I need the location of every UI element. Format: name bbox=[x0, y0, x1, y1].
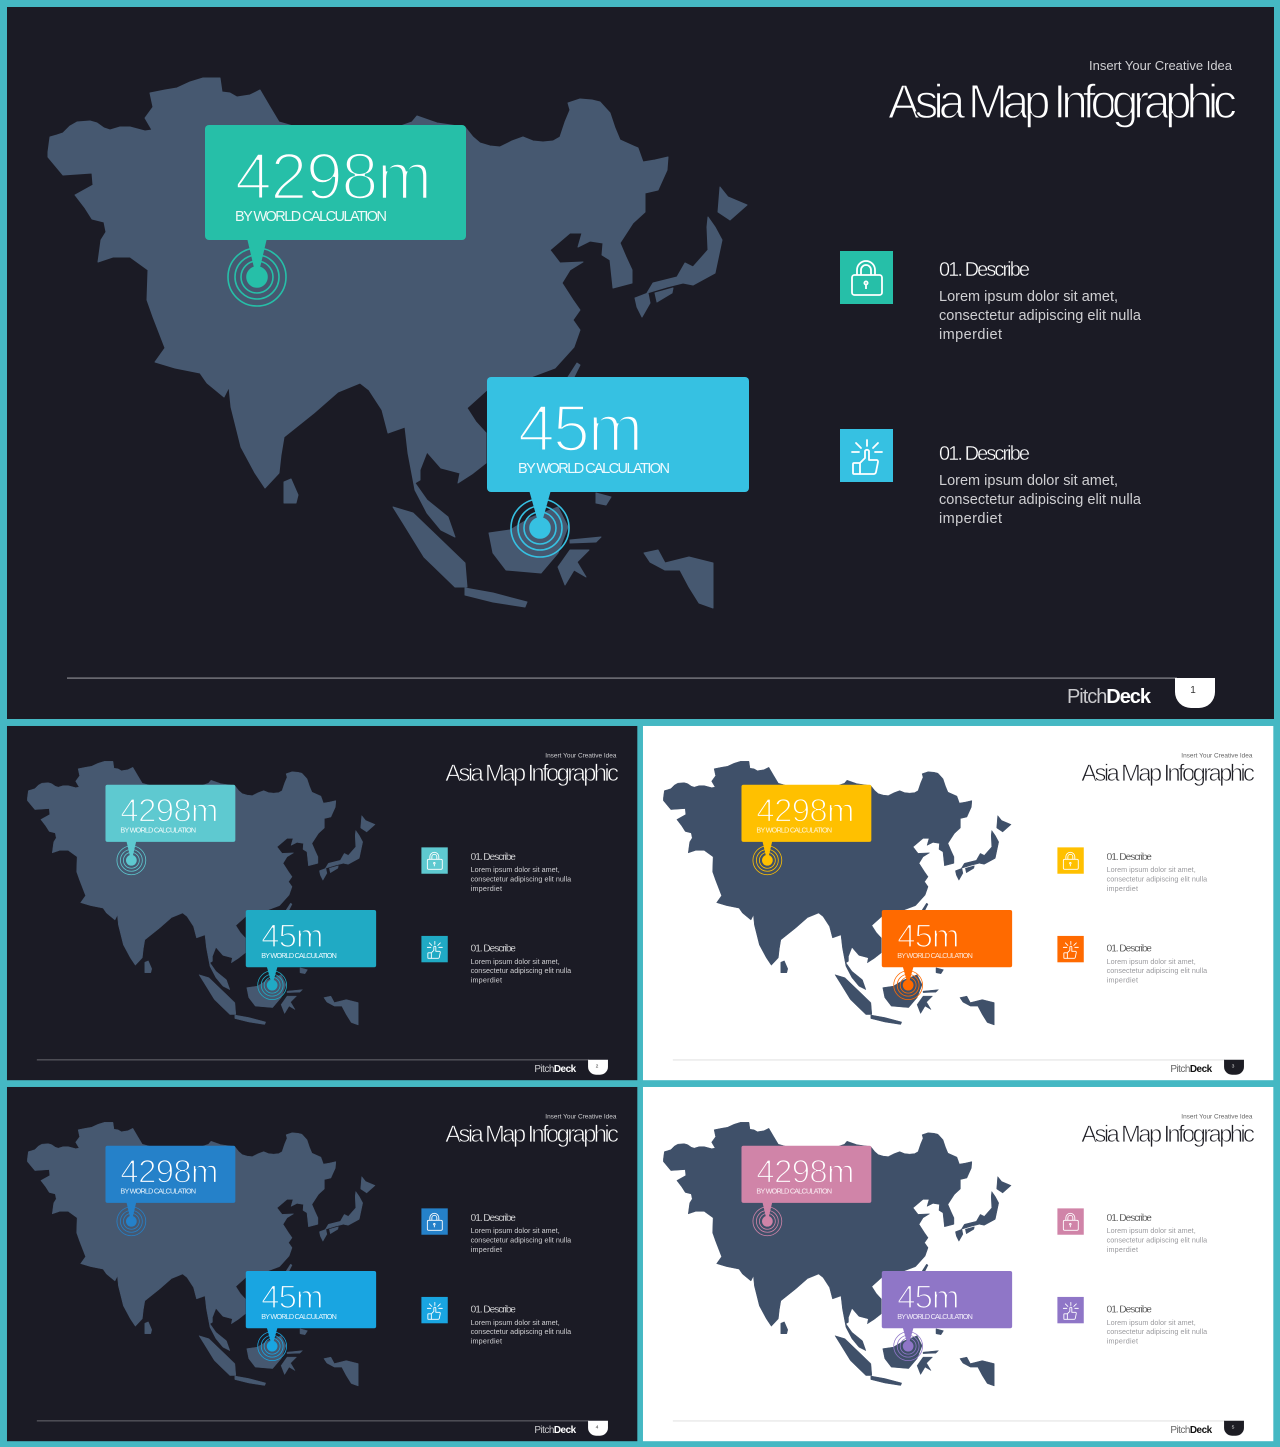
text block: describe 1: consectetur adipiscing elit nulla bbox=[1107, 875, 1207, 884]
target rings: central Asia bbox=[753, 846, 782, 875]
text block: describe 1: consectetur adipiscing elit nulla bbox=[1107, 1236, 1207, 1245]
panel: slide 2 small dark aqua bbox=[7, 726, 637, 1080]
text block: describe 2: 01. Describe bbox=[471, 943, 516, 954]
text block: describe 2: consectetur adipiscing elit nulla bbox=[939, 492, 1142, 508]
callout: 45m: 45m bbox=[261, 1278, 323, 1315]
text block: describe 1: 01. Describe bbox=[939, 259, 1030, 281]
callout: 4298m bbox=[105, 785, 235, 858]
callout: 4298m: BY WORLD CALCULATION bbox=[120, 1186, 196, 1195]
title: Asia Map Infographic bbox=[445, 1121, 619, 1148]
text block: describe 2: 01. Describe bbox=[1107, 943, 1152, 954]
text block: describe 1 bbox=[939, 259, 1142, 343]
icon: thumb up bbox=[421, 936, 448, 962]
text block: describe 1: consectetur adipiscing elit nulla bbox=[939, 308, 1142, 324]
callout: 4298m: BY WORLD CALCULATION bbox=[756, 825, 832, 834]
page tab: 3 bbox=[1232, 1063, 1235, 1069]
text block: describe 1: 01. Describe bbox=[471, 852, 516, 863]
page tab bbox=[588, 1060, 608, 1075]
panel: slide 5 small light pink purple bbox=[643, 1087, 1273, 1441]
callout: 45m bbox=[882, 910, 1012, 982]
callout: 45m bbox=[882, 1271, 1012, 1343]
callout: 4298m: BY WORLD CALCULATION bbox=[756, 1186, 832, 1195]
text block: describe 2: imperdiet bbox=[1107, 1337, 1138, 1346]
text block: describe 1: Lorem ipsum dolor sit amet, bbox=[471, 1226, 560, 1235]
text block: describe 2 bbox=[939, 443, 1142, 527]
footer logo: PitchDeck bbox=[1067, 686, 1152, 708]
text block: describe 2: imperdiet bbox=[939, 511, 1002, 527]
callout: 45m: 45m bbox=[261, 917, 323, 954]
text block: describe 1: imperdiet bbox=[939, 327, 1002, 343]
target rings: Borneo bbox=[894, 1332, 923, 1361]
text block: describe 1: imperdiet bbox=[1107, 1245, 1138, 1254]
page tab bbox=[1224, 1060, 1244, 1075]
text block: describe 2: Lorem ipsum dolor sit amet, bbox=[1107, 957, 1196, 966]
icon: thumb up bbox=[1057, 936, 1084, 962]
callout: 4298m: 4298m bbox=[756, 792, 854, 829]
callout: 4298m bbox=[741, 785, 871, 858]
text block: describe 2: imperdiet bbox=[471, 1337, 502, 1346]
page tab bbox=[1224, 1421, 1244, 1436]
callout: 45m: BY WORLD CALCULATION bbox=[897, 1312, 973, 1321]
target rings: central Asia bbox=[753, 1207, 782, 1236]
icon: lock bbox=[421, 1208, 448, 1235]
icon: lock bbox=[421, 847, 448, 874]
text block: describe 2 bbox=[471, 1304, 571, 1346]
footer logo: PitchDeck bbox=[1170, 1425, 1213, 1436]
target rings: Borneo bbox=[258, 1332, 287, 1361]
title: Asia Map Infographic bbox=[888, 76, 1237, 129]
callout: 45m: 45m bbox=[897, 1278, 959, 1315]
callout: 45m: BY WORLD CALCULATION bbox=[897, 951, 973, 960]
text block: describe 1: Lorem ipsum dolor sit amet, bbox=[1107, 865, 1196, 874]
callout: 4298m: 4298m bbox=[120, 792, 218, 829]
map of Asia bbox=[663, 761, 1011, 1025]
callout: 4298m: BY WORLD CALCULATION bbox=[120, 825, 196, 834]
map of Asia bbox=[27, 761, 375, 1025]
callout: 4298m bbox=[741, 1146, 871, 1219]
panel: slide 1 large dark teal bbox=[7, 7, 1274, 719]
target rings: Borneo bbox=[258, 971, 287, 1000]
text block: describe 1: Lorem ipsum dolor sit amet, bbox=[471, 865, 560, 874]
callout: 45m: 45m bbox=[518, 391, 643, 465]
callout: 45m: 45m bbox=[897, 917, 959, 954]
callout: 45m bbox=[246, 910, 376, 982]
text block: describe 2: consectetur adipiscing elit nulla bbox=[1107, 966, 1207, 975]
text block: describe 1 bbox=[1107, 852, 1207, 893]
page tab bbox=[1175, 678, 1215, 708]
target rings: Borneo bbox=[894, 971, 923, 1000]
text block: describe 2 bbox=[1107, 943, 1207, 985]
text block: describe 2: consectetur adipiscing elit nulla bbox=[471, 1327, 571, 1336]
text block: describe 1 bbox=[471, 852, 571, 893]
callout: 45m: BY WORLD CALCULATION bbox=[518, 461, 670, 477]
panel: slide 3 small light yellow orange bbox=[643, 726, 1273, 1080]
callout: 45m bbox=[246, 1271, 376, 1343]
text block: describe 2: imperdiet bbox=[1107, 976, 1138, 985]
text block: describe 2: 01. Describe bbox=[939, 443, 1030, 465]
text block: describe 1: 01. Describe bbox=[471, 1213, 516, 1224]
icon: lock bbox=[1057, 847, 1084, 874]
panel: slide 4 small dark blue bbox=[7, 1087, 637, 1441]
text block: describe 1: 01. Describe bbox=[1107, 1213, 1152, 1224]
callout: 4298m bbox=[105, 1146, 235, 1219]
page tab: 2 bbox=[596, 1063, 599, 1069]
text block: describe 2 bbox=[1107, 1304, 1207, 1346]
text block: describe 1: Lorem ipsum dolor sit amet, bbox=[1107, 1226, 1196, 1235]
subtitle: Insert Your Creative Idea bbox=[545, 1113, 617, 1120]
text block: describe 1: imperdiet bbox=[471, 884, 502, 893]
footer logo: PitchDeck bbox=[534, 1064, 577, 1075]
text block: describe 1: imperdiet bbox=[1107, 884, 1138, 893]
text block: describe 1: imperdiet bbox=[471, 1245, 502, 1254]
text block: describe 2: Lorem ipsum dolor sit amet, bbox=[939, 473, 1118, 489]
title: Asia Map Infographic bbox=[445, 760, 619, 787]
title: Asia Map Infographic bbox=[1081, 1121, 1255, 1148]
subtitle: Insert Your Creative Idea bbox=[545, 752, 617, 759]
text block: describe 2: Lorem ipsum dolor sit amet, bbox=[471, 957, 560, 966]
map of Asia bbox=[48, 78, 747, 608]
icon: thumb up bbox=[840, 429, 893, 482]
callout: 4298m: BY WORLD CALCULATION bbox=[235, 209, 387, 225]
callout: 45m bbox=[487, 377, 749, 522]
text block: describe 2 bbox=[471, 943, 571, 985]
text block: describe 1: consectetur adipiscing elit nulla bbox=[471, 1236, 571, 1245]
target rings: central Asia bbox=[117, 846, 146, 875]
text block: describe 2: Lorem ipsum dolor sit amet, bbox=[1107, 1318, 1196, 1327]
text block: describe 1: Lorem ipsum dolor sit amet, bbox=[939, 289, 1118, 305]
footer logo: PitchDeck bbox=[1170, 1064, 1213, 1075]
text block: describe 1: 01. Describe bbox=[1107, 852, 1152, 863]
map of Asia bbox=[663, 1122, 1011, 1386]
icon: thumb up bbox=[421, 1297, 448, 1323]
callout: 45m: BY WORLD CALCULATION bbox=[261, 951, 337, 960]
map of Asia bbox=[27, 1122, 375, 1386]
callout: 4298m: 4298m bbox=[235, 139, 432, 213]
callout: 4298m: 4298m bbox=[120, 1153, 218, 1190]
target rings: central Asia bbox=[228, 248, 286, 306]
icon: thumb up bbox=[1057, 1297, 1084, 1323]
icon: lock bbox=[840, 251, 893, 304]
text block: describe 2: Lorem ipsum dolor sit amet, bbox=[471, 1318, 560, 1327]
title: Asia Map Infographic bbox=[1081, 760, 1255, 787]
target rings: central Asia bbox=[117, 1207, 146, 1236]
text block: describe 2: consectetur adipiscing elit nulla bbox=[471, 966, 571, 975]
icon: lock bbox=[1057, 1208, 1084, 1235]
page tab: 5 bbox=[1232, 1424, 1235, 1430]
subtitle: Insert Your Creative Idea bbox=[1181, 1113, 1253, 1120]
text block: describe 2: 01. Describe bbox=[471, 1304, 516, 1315]
text block: describe 1 bbox=[1107, 1213, 1207, 1254]
subtitle: Insert Your Creative Idea bbox=[1181, 752, 1253, 759]
text block: describe 2: imperdiet bbox=[471, 976, 502, 985]
text block: describe 1 bbox=[471, 1213, 571, 1254]
callout: 4298m bbox=[205, 125, 466, 272]
text block: describe 2: consectetur adipiscing elit nulla bbox=[1107, 1327, 1207, 1336]
text block: describe 2: 01. Describe bbox=[1107, 1304, 1152, 1315]
text block: describe 1: consectetur adipiscing elit nulla bbox=[471, 875, 571, 884]
subtitle: Insert Your Creative Idea bbox=[1089, 58, 1233, 73]
footer logo: PitchDeck bbox=[534, 1425, 577, 1436]
page tab: 1 bbox=[1190, 685, 1196, 696]
target rings: Borneo bbox=[511, 499, 569, 557]
page tab: 4 bbox=[596, 1424, 599, 1430]
callout: 4298m: 4298m bbox=[756, 1153, 854, 1190]
callout: 45m: BY WORLD CALCULATION bbox=[261, 1312, 337, 1321]
page tab bbox=[588, 1421, 608, 1436]
